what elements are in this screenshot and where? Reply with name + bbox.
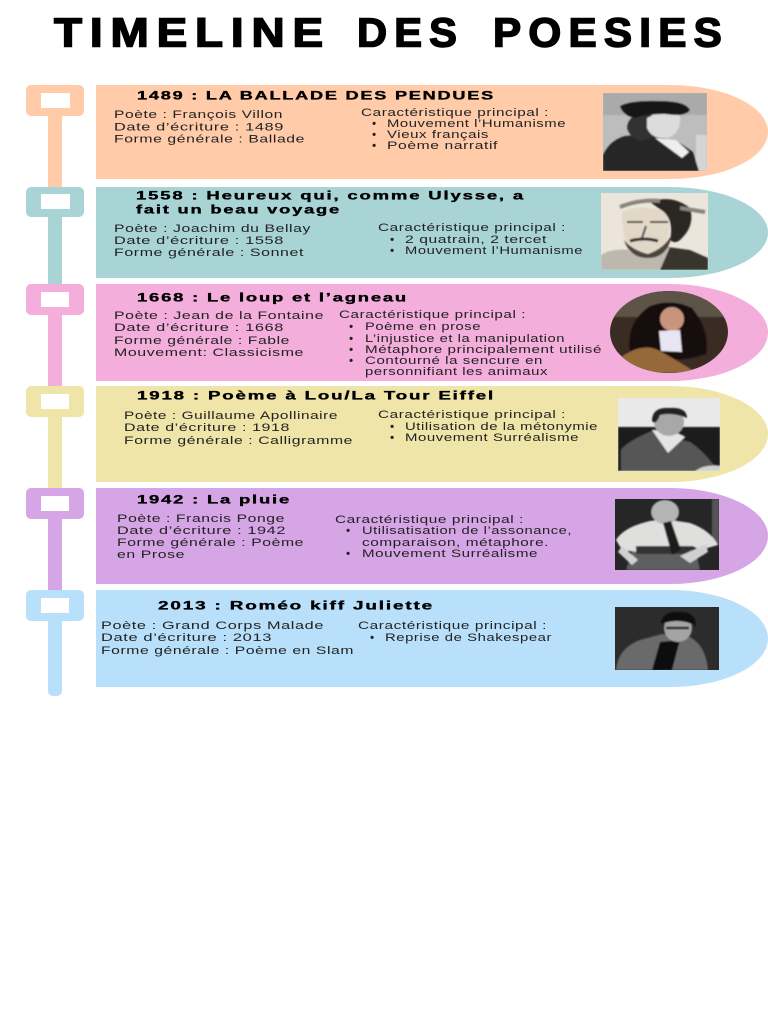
poem facts 1942: Forme générale : Poème <box>117 537 304 549</box>
characteristics 1918: Utilisation de la métonymie <box>405 421 598 433</box>
poem facts 1489: Date d’écriture : 1489 <box>114 122 284 134</box>
poem facts 2013 <box>101 620 354 657</box>
characteristics 2013: Reprise de Shakespear <box>385 632 552 644</box>
timeline marker 1489 <box>26 85 84 188</box>
title: POESIES <box>493 10 729 56</box>
heading 1668: 1668 : Le loup et l’agneau <box>137 290 408 304</box>
poem facts 1558: Date d’écriture : 1558 <box>114 235 284 247</box>
poem facts 1489 <box>114 109 305 146</box>
timeline entry: 1918 <box>26 386 768 490</box>
poem facts 2013: Date d’écriture : 2013 <box>101 632 272 644</box>
timeline entry: 2013 <box>26 590 768 696</box>
poem facts 1489: Poète : François Villon <box>114 109 283 121</box>
poem facts 1668: Forme générale : Fable <box>114 335 290 347</box>
heading 1489: 1489 : LA BALLADE DES PENDUES <box>137 88 495 102</box>
characteristics 1489 <box>361 107 566 152</box>
timeline marker 1668 <box>26 284 84 388</box>
poem facts 1558: Poète : Joachim du Bellay <box>114 223 311 235</box>
heading 1918: 1918 : Poème à Lou/La Tour Eiffel <box>137 388 495 402</box>
poem facts 1918 <box>124 410 353 447</box>
characteristics 1942 <box>335 514 572 560</box>
characteristics 1558: • <box>390 244 394 258</box>
characteristics 1668: • <box>349 354 353 368</box>
characteristics 1489: Poème narratif <box>387 140 498 152</box>
characteristics 1668: personnifiant les animaux <box>365 366 548 378</box>
timeline marker 1942 <box>26 488 84 592</box>
title: TIMELINE <box>54 10 331 56</box>
poem facts 1918: Date d’écriture : 1918 <box>124 422 290 434</box>
heading 1942: 1942 : La pluie <box>137 492 291 506</box>
heading 1558: 1558 : Heureux qui, comme Ulysse, a <box>136 188 525 202</box>
characteristics 1489: Caractéristique principal : <box>361 107 549 119</box>
poem facts 1942: en Prose <box>117 549 185 561</box>
characteristics 1489: Mouvement l’Humanisme <box>387 118 566 130</box>
characteristics 2013: Caractéristique principal : <box>358 620 547 632</box>
poem facts 1918: Poète : Guillaume Apollinaire <box>124 410 338 422</box>
poem facts 1668: Mouvement: Classicisme <box>114 347 304 359</box>
panel background 1489 <box>96 85 768 179</box>
characteristics 1558 <box>378 222 583 258</box>
portrait: Francis Ponge <box>615 499 719 570</box>
portrait: Grand Corps Malade <box>615 607 719 670</box>
characteristics 1668: Caractéristique principal : <box>339 309 526 321</box>
characteristics 1918: Caractéristique principal : <box>378 409 566 421</box>
characteristics 1558: 2 quatrain, 2 tercet <box>405 234 547 246</box>
characteristics 1942: Mouvement Surréalisme <box>362 548 538 560</box>
portrait: Joachim du Bellay <box>601 193 708 270</box>
characteristics 1918: Mouvement Surréalisme <box>405 432 579 444</box>
characteristics 1668: Poème en prose <box>365 321 481 333</box>
timeline marker 1918 <box>26 386 84 490</box>
portrait: Guillaume Apollinaire <box>618 398 720 471</box>
title: DES <box>357 10 464 56</box>
characteristics 1558: Caractéristique principal : <box>378 222 566 234</box>
characteristics 1668: L’injustice et la manipulation <box>365 333 565 345</box>
panel background 1918 <box>96 386 768 482</box>
characteristics 1942: • <box>346 546 350 560</box>
poem facts 1668: Date d’écriture : 1668 <box>114 322 284 334</box>
characteristics 1558: Mouvement l’Humanisme <box>405 245 583 257</box>
characteristics 1489: • <box>372 128 376 142</box>
characteristics 1942: • <box>346 524 350 538</box>
characteristics 1558: • <box>390 232 394 246</box>
characteristics 1918 <box>378 409 598 444</box>
timeline marker 2013 <box>26 590 84 696</box>
timeline entry: 1489 <box>26 85 768 188</box>
heading 1558 <box>136 188 525 216</box>
panel background 1558 <box>96 187 768 278</box>
poem facts 1942: Poète : Francis Ponge <box>117 513 285 525</box>
characteristics 1668: • <box>349 332 353 346</box>
characteristics 1668: Métaphore principalement utilisé <box>365 344 602 356</box>
poem facts 1668: Poète : Jean de la Fontaine <box>114 310 324 322</box>
poem facts 1558: Forme générale : Sonnet <box>114 247 304 259</box>
characteristics 1489: • <box>372 116 376 130</box>
characteristics 1942: Utilisatisation de l’assonance, <box>362 525 572 537</box>
characteristics 2013 <box>358 620 552 644</box>
poem facts 1918: Forme générale : Calligramme <box>124 435 353 447</box>
characteristics 1668: • <box>349 342 353 356</box>
timeline marker 1558 <box>26 187 84 286</box>
panel background 1942 <box>96 488 768 584</box>
poem facts 1942 <box>117 513 304 561</box>
timeline entry: 1668 <box>26 284 768 388</box>
poem facts 1668 <box>114 310 324 359</box>
characteristics 1918: • <box>390 420 394 434</box>
characteristics 1942: comparaison, métaphore. <box>362 537 549 549</box>
poem facts 2013: Forme générale : Poème en Slam <box>101 645 354 657</box>
panel background 1668 <box>96 284 768 381</box>
characteristics 1942: Caractéristique principal : <box>335 514 524 526</box>
timeline entry: 1942 <box>26 488 768 592</box>
poem facts 2013: Poète : Grand Corps Malade <box>101 620 324 632</box>
characteristics 1668: • <box>349 320 353 334</box>
poem facts 1489: Forme générale : Ballade <box>114 134 305 146</box>
portrait: François Villon <box>603 93 707 171</box>
characteristics 1668: Contourné la sencure en <box>365 355 543 367</box>
poem facts 1558 <box>114 223 311 259</box>
heading 2013: 2013 : Roméo kiff Juliette <box>158 598 434 612</box>
panel background 2013 <box>96 590 768 687</box>
characteristics 1918: • <box>390 430 394 444</box>
portrait: Jean de la Fontaine <box>610 291 728 373</box>
characteristics 1668 <box>339 309 602 378</box>
characteristics 1489: • <box>372 138 376 152</box>
characteristics 1489: Vieux français <box>387 129 489 141</box>
timeline entry: 1558 <box>26 187 768 286</box>
heading 1558: fait un beau voyage <box>136 202 341 216</box>
poem facts 1942: Date d’écriture : 1942 <box>117 525 286 537</box>
characteristics 2013: • <box>370 630 374 644</box>
title <box>54 10 729 56</box>
